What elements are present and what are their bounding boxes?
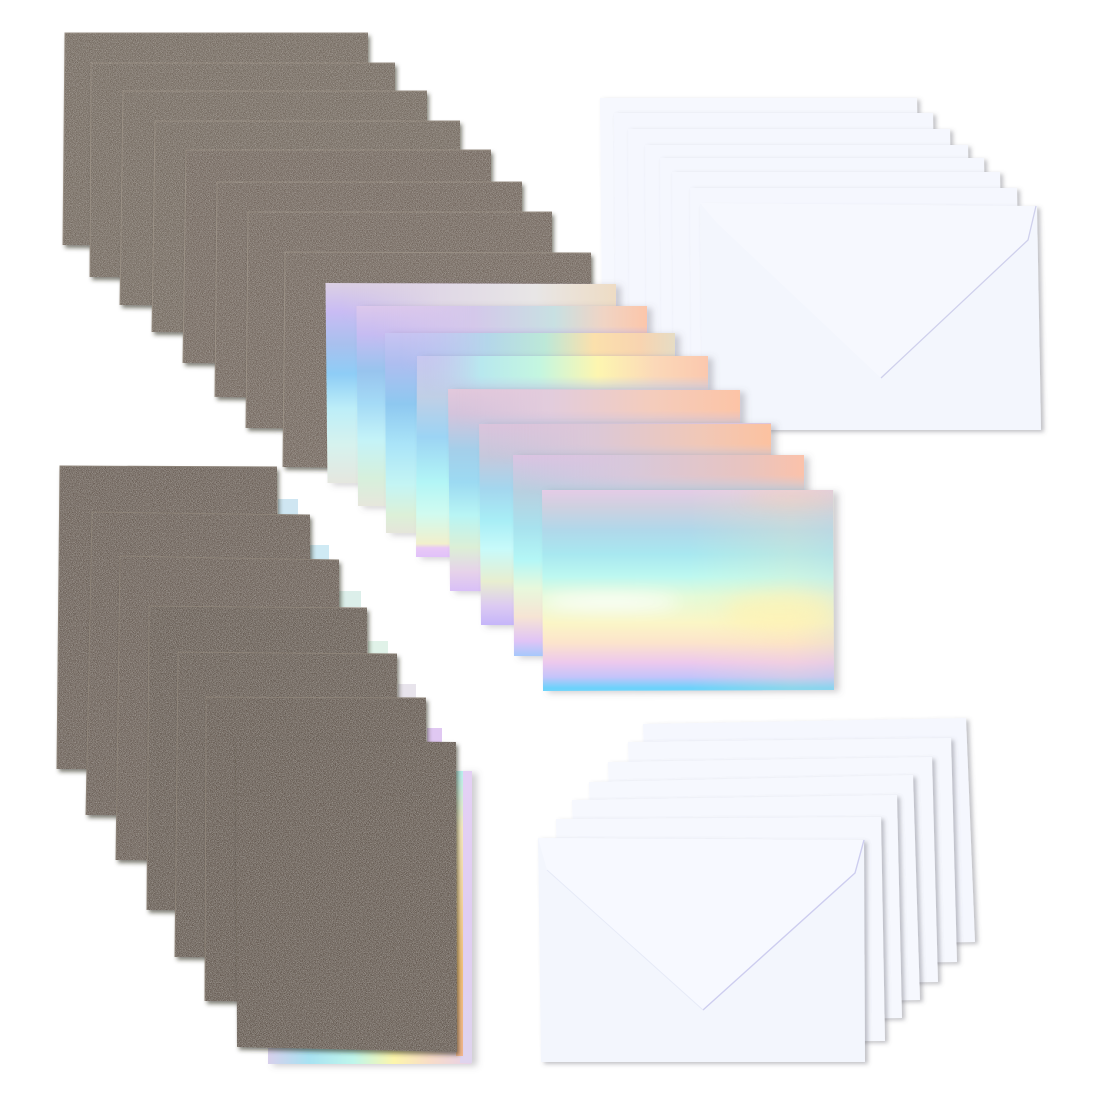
holo card 1	[326, 283, 618, 485]
holo card 7	[513, 455, 806, 657]
holo card 5	[448, 389, 742, 592]
stack: white envelopes, bottom right	[538, 718, 975, 1062]
flap edge line	[703, 840, 864, 1010]
holo card 6	[479, 423, 773, 626]
stack: holographic cards, centre	[326, 283, 845, 691]
holo card 8, front	[540, 490, 845, 691]
holo tabs behind taupe cards	[278, 499, 442, 743]
front envelope body	[700, 205, 1041, 430]
front envelope flap	[538, 838, 863, 1010]
front taupe card	[236, 740, 457, 1052]
holo card 3	[385, 333, 677, 535]
stack: taupe cards, top left	[63, 33, 593, 470]
stack: taupe cards backed with holographic, bottom left	[57, 466, 472, 1064]
rear holographic card strips	[268, 771, 472, 1064]
front envelope flap	[700, 203, 1036, 378]
flap edge line	[881, 206, 1036, 378]
stack: white envelopes, top right	[600, 98, 1041, 430]
holo card 4	[416, 356, 710, 558]
left fold line	[547, 870, 703, 1010]
holo card 2	[356, 306, 649, 508]
front envelope body	[538, 838, 865, 1062]
